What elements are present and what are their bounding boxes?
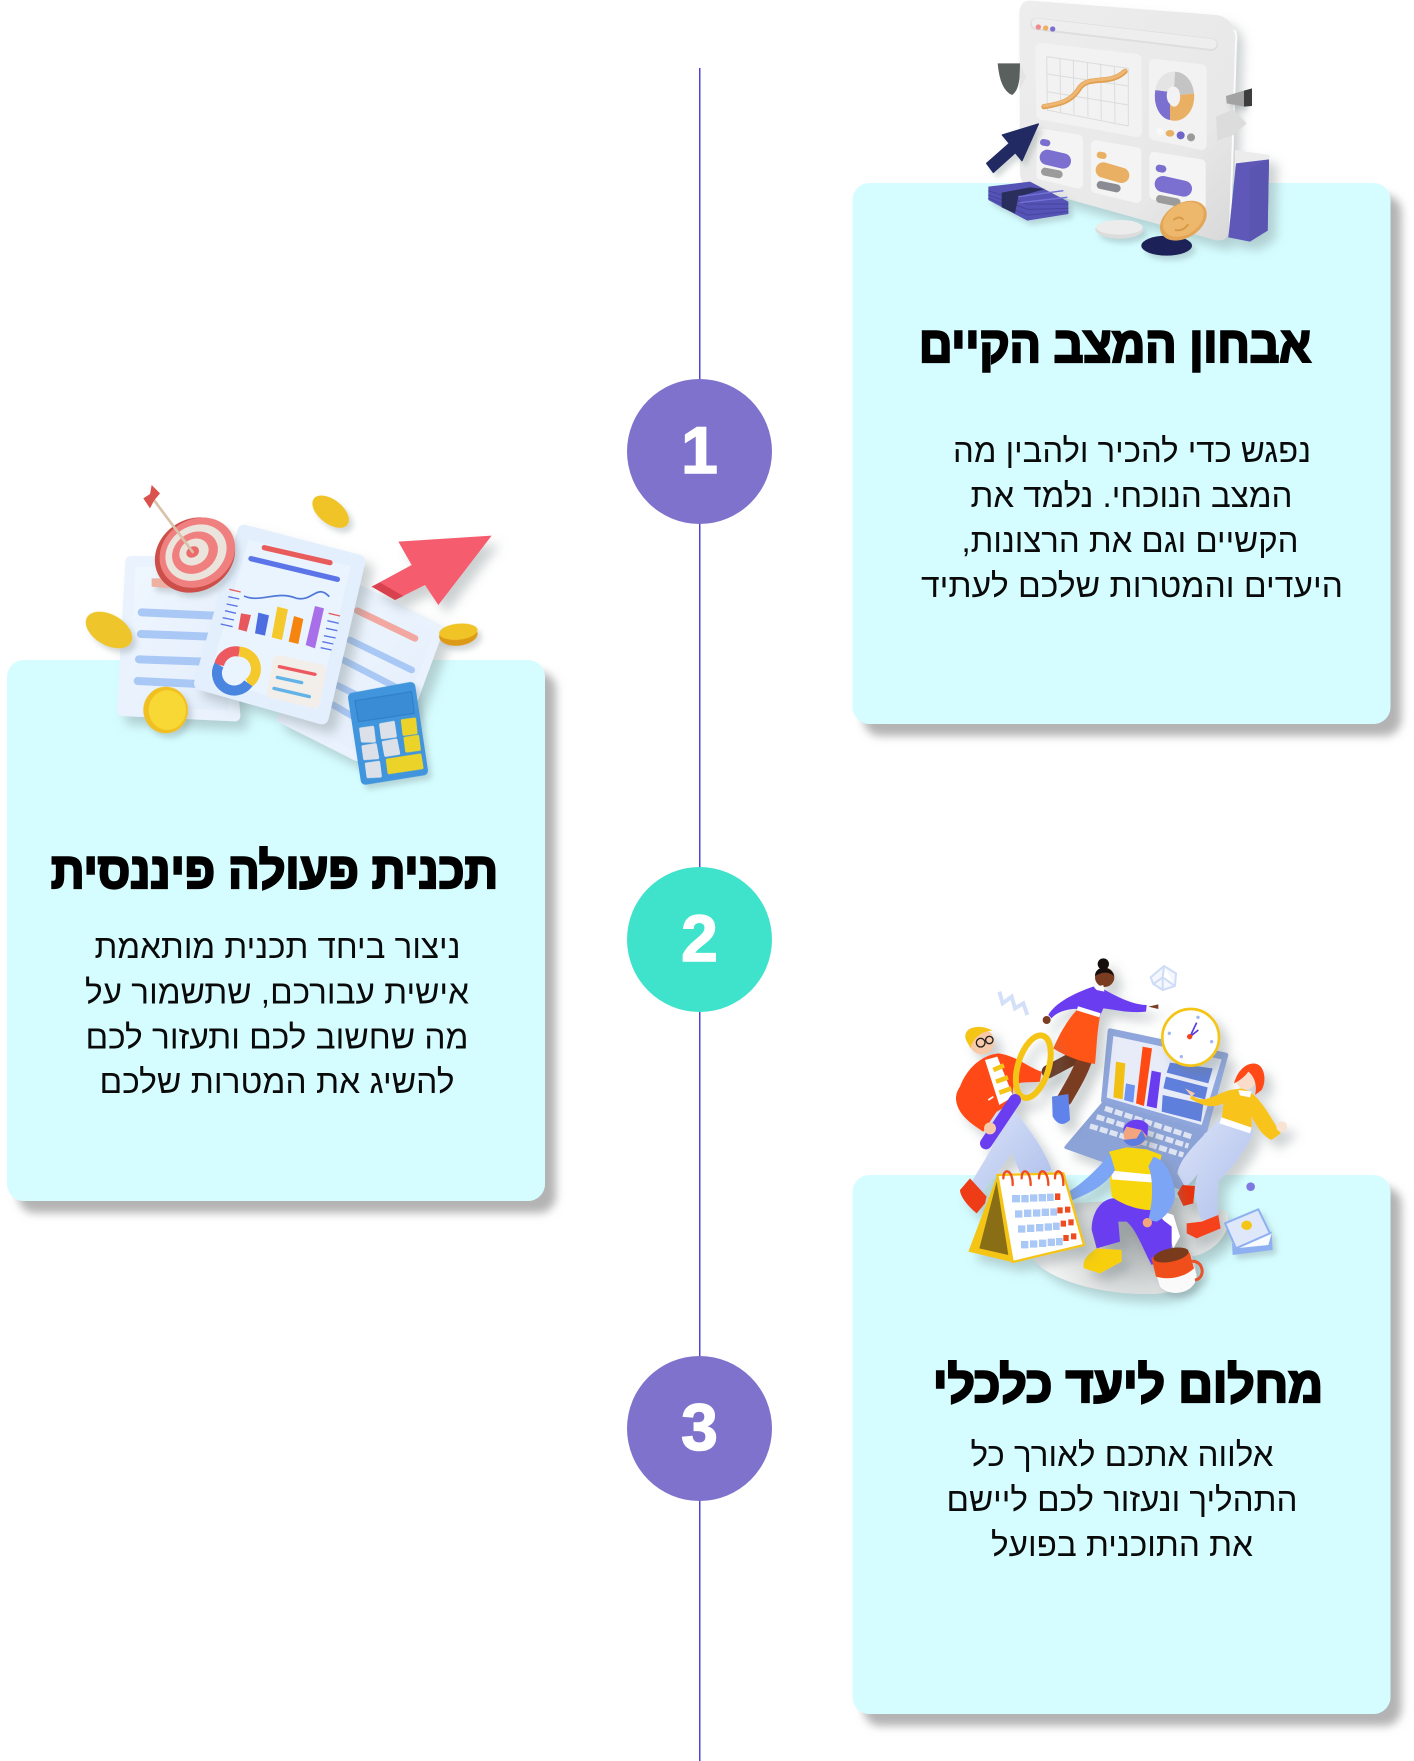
step 3 number [627, 1356, 772, 1501]
text block: step 3: התהליך ונעזור לכם ליישם [946, 1481, 1298, 1518]
purple ball [1246, 1182, 1255, 1191]
back right document [281, 590, 439, 757]
step 1 number [627, 379, 772, 524]
money [1225, 1209, 1273, 1255]
icon: dashboard illustration [987, 1, 1269, 256]
panel: step 2 card [7, 660, 545, 1201]
coffee mug [1152, 1245, 1202, 1293]
text block: step 2: אישית עבורכם, שתשמור על [85, 974, 469, 1010]
text block: step 1: המצב הנוכחי. נלמד את [970, 477, 1292, 514]
text block: step 3: את התוכנית בפועל [991, 1526, 1253, 1563]
person: woman in yellow [1177, 1064, 1287, 1238]
banknotes [988, 182, 1068, 221]
cube and zigzag [1151, 966, 1176, 990]
person: kneeling man [1060, 1120, 1180, 1273]
text block: step 1: נפגש כדי להכיר ולהבין מה [953, 432, 1311, 469]
red arrow [372, 536, 492, 605]
text block: step 2: להשיג את המטרות שלכם [100, 1063, 454, 1100]
step 3 number: 3 [681, 1390, 718, 1464]
center document [201, 531, 359, 718]
panel: step 1 card [852, 183, 1390, 724]
calculator [353, 687, 423, 780]
chart card [1041, 48, 1137, 132]
side shapes [998, 63, 1020, 95]
mini cards [1041, 133, 1078, 184]
donut chart [217, 651, 256, 691]
heading: step 1: אבחון המצב הקיים [919, 317, 1311, 373]
back left document [122, 561, 235, 716]
text block: step 2: מה שחשוב לכם ותעזור לכם [86, 1018, 468, 1056]
text block: step 3 [946, 1436, 1298, 1563]
heading: step 2: תכנית פעולה פיננסית [51, 843, 498, 899]
laptop [1066, 1031, 1226, 1188]
heading: step 3: מחלום ליעד כלכלי [933, 1357, 1323, 1413]
text block: step 1: הקשיים וגם את הרצונות, [962, 522, 1298, 559]
calendar [968, 1173, 1084, 1262]
text block: step 2 [85, 928, 469, 1100]
coins [79, 489, 479, 733]
person: woman in purple [1043, 958, 1158, 1124]
text block: step 1: היעדים והמטרות שלכם לעתיד [921, 567, 1343, 604]
icon: team illustration [956, 958, 1287, 1294]
clock [1162, 1009, 1219, 1066]
person: man with magnifier [956, 1027, 1057, 1213]
text block: step 1 [921, 432, 1343, 604]
legend card [273, 661, 321, 703]
cursor arrow [987, 124, 1038, 172]
purple block [1228, 150, 1269, 242]
donut card [1154, 64, 1202, 145]
panel: step 3 card [852, 1175, 1390, 1714]
floor platter [1033, 1197, 1228, 1294]
coins [1095, 220, 1143, 239]
text block: step 2: ניצור ביחד תכנית מותאמת [94, 928, 460, 965]
icon: financial documents illustration [79, 485, 492, 780]
text block: step 3: אלווה אתכם לאורך כל [970, 1436, 1274, 1473]
step 2 number [627, 867, 772, 1012]
timeline line [699, 68, 700, 1761]
target and dart [141, 502, 249, 608]
step 2 number: 2 [681, 901, 718, 975]
step 1 number: 1 [681, 413, 718, 487]
